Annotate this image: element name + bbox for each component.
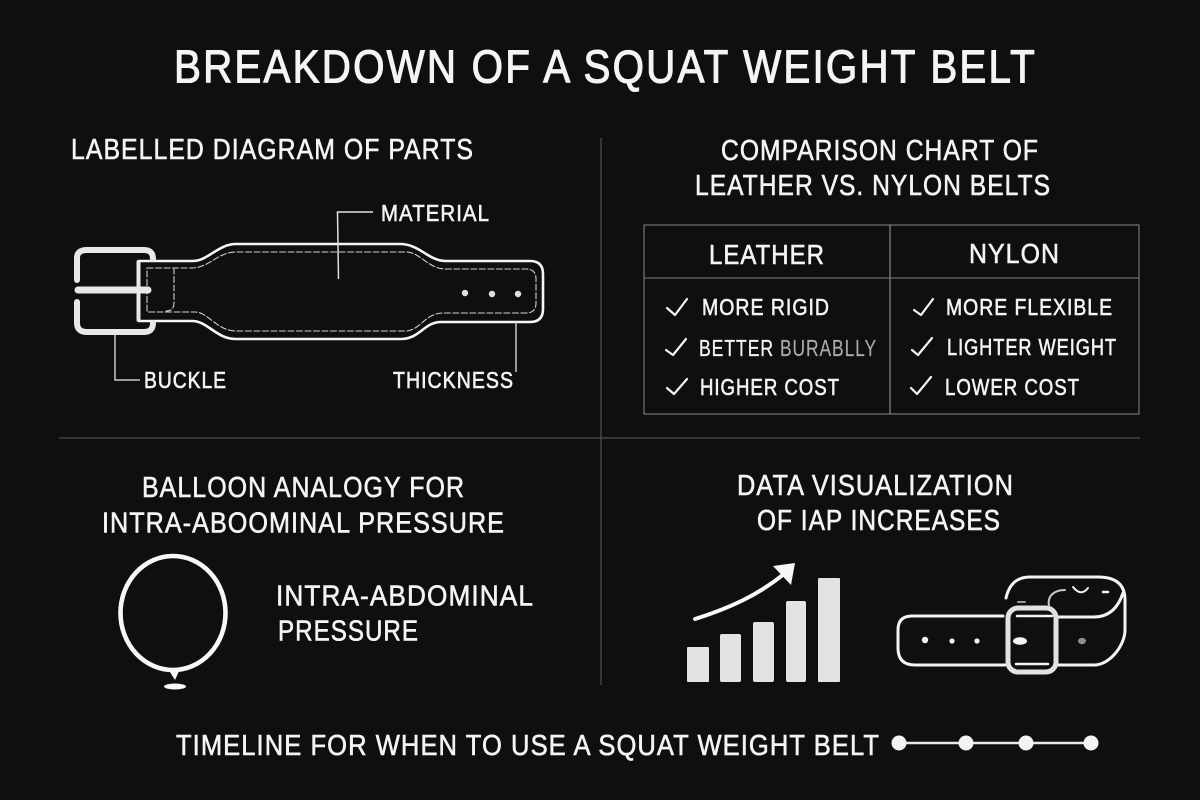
timeline track	[892, 736, 1098, 750]
belt outline	[139, 244, 543, 339]
panel: balloon analogy	[102, 472, 534, 690]
belt holes	[462, 290, 521, 297]
leader: thickness	[515, 322, 517, 372]
check marks	[666, 299, 933, 394]
label: intra-abdominal pressure: INTRA-ABDOMINAL	[276, 580, 534, 612]
heading: comparison chart	[695, 135, 1051, 202]
nylon rows	[945, 294, 1117, 400]
heading: balloon analogy: INTRA-ABOOMINAL PRESSURE	[102, 508, 505, 540]
column header: nylon: NYLON	[969, 238, 1060, 269]
heading: data visualization: OF IAP INCREASES	[757, 505, 1001, 537]
heading: comparison chart: LEATHER VS. NYLON BELTS	[695, 170, 1051, 202]
heading: balloon analogy: BALLOON ANALOGY FOR	[142, 472, 465, 504]
icon: balloon	[120, 556, 226, 690]
arrow: rising trend	[695, 563, 795, 619]
column header: leather: LEATHER	[709, 239, 825, 270]
label: intra-abdominal pressure	[276, 580, 534, 648]
buckle prong	[78, 286, 148, 294]
label: thickness: THICKNESS	[393, 367, 514, 393]
buckle bar	[136, 262, 140, 320]
heading: data visualization: DATA VISUALIZATION	[737, 470, 1014, 502]
panel: comparison chart	[644, 135, 1139, 414]
heading: data visualization	[737, 470, 1014, 537]
nylon rows: MORE FLEXIBLE	[946, 294, 1113, 320]
heading: comparison chart: COMPARISON CHART OF	[721, 135, 1039, 167]
heading: balloon analogy	[102, 472, 505, 540]
leather rows: BURABLLY	[780, 335, 877, 361]
leather rows	[699, 294, 877, 400]
label: intra-abdominal pressure: PRESSURE	[278, 616, 419, 648]
label: buckle: BUCKLE	[144, 367, 227, 393]
leader: material	[338, 212, 373, 279]
label: material: MATERIAL	[381, 200, 490, 226]
leader: buckle	[115, 335, 140, 380]
leather rows: HIGHER COST	[700, 374, 840, 400]
icon: wrapped belt	[898, 577, 1125, 672]
bar chart	[687, 578, 840, 682]
leather rows: BETTER	[699, 335, 774, 361]
heading: labelled diagram: LABELLED DIAGRAM OF PARTS	[71, 134, 474, 166]
timeline	[176, 730, 1098, 762]
icon: belt diagram	[77, 244, 543, 339]
panel: data visualization	[687, 470, 1125, 682]
belt stitching	[147, 252, 536, 331]
nylon rows: LOWER COST	[945, 374, 1080, 400]
buckle frame	[77, 250, 153, 332]
title: BREAKDOWN OF A SQUAT WEIGHT BELT	[174, 40, 1037, 92]
nylon rows: LIGHTER WEIGHT	[947, 334, 1117, 360]
panel: labelled diagram of parts	[71, 134, 543, 393]
leather rows: MORE RIGID	[702, 294, 830, 320]
timeline label: TIMELINE FOR WHEN TO USE A SQUAT WEIGHT BELT	[176, 730, 880, 762]
comparison table	[644, 225, 1139, 414]
